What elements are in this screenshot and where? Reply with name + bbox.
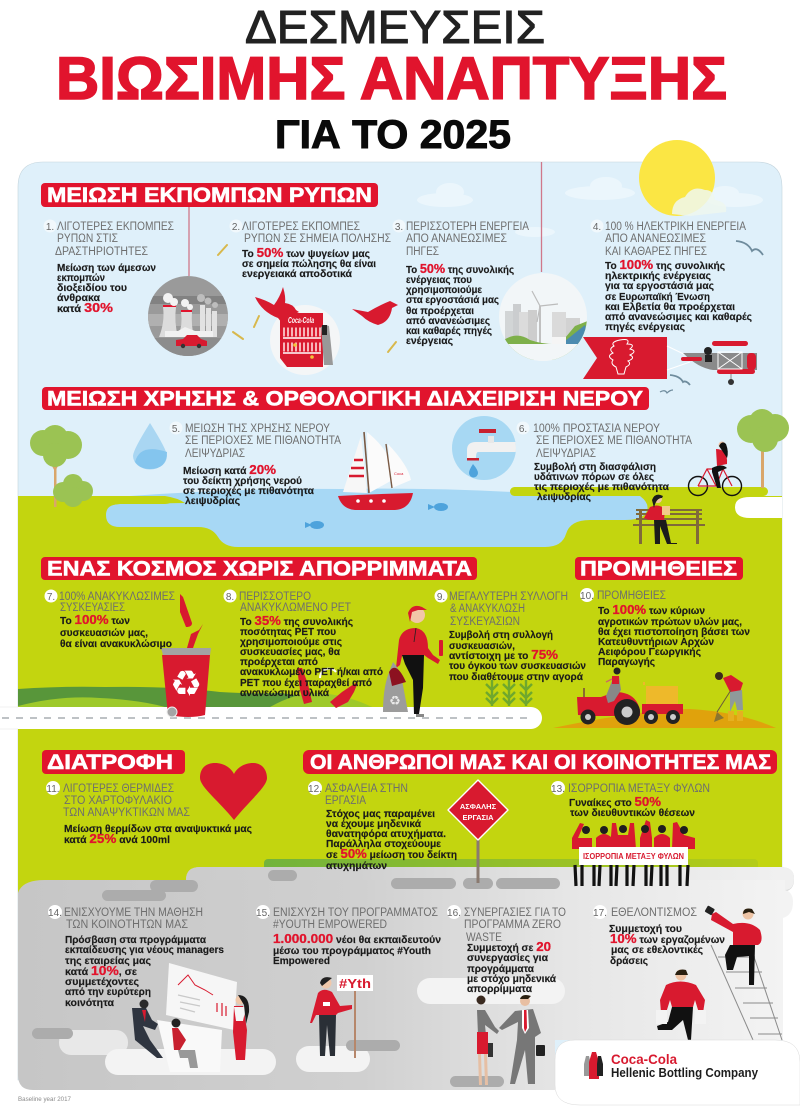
text block: commitment 11: Μείωση θερμίδων στα αναψυκτικά μας [64, 824, 252, 835]
text block: commitment 1: ΔΡΑΣΤΗΡΙΟΤΗΤΕΣ [55, 246, 148, 258]
icon: factory [148, 276, 228, 356]
text block: commitment 3: και καθαρές πηγές [406, 326, 492, 337]
icon: birds [660, 241, 763, 393]
text block: commitment 5 [170, 422, 341, 507]
text block: commitment 16: Συμμετοχή σε 20 [467, 939, 551, 954]
text block: commitment 16 [447, 905, 566, 995]
text block: commitment 12: ΕΡΓΑΣΙΑ [325, 795, 366, 807]
icon: fridge with bird: Coca-Cola [288, 316, 314, 325]
text block: commitment 12: να έχουμε μηδενικά [326, 819, 422, 830]
text block: commitment 14: ΕΝΙΣΧΥΟΥΜΕ ΤΗΝ ΜΑΘΗΣΗ [64, 907, 203, 919]
text block: commitment 9: ΣΥΣΚΕΥΑΣΙΩΝ [450, 616, 520, 628]
icon: road sign: ΑΣΦΑΛΗΣ [460, 802, 497, 811]
text block: commitment 14: κατά 10%, σε [65, 963, 137, 978]
text block: commitment 9: συσκευασιών, [449, 641, 515, 652]
green stripe [264, 859, 758, 871]
text block: commitment 8: ανανεώσιμα υλικά [240, 688, 330, 699]
text block: commitment 1: κατά 30% [57, 300, 113, 315]
text block: commitment 10: Αειφόρου Γεωργικής [598, 647, 701, 658]
text block: commitment 4: σε Ευρωπαϊκή Ένωση [605, 292, 710, 303]
text block: commitment 5: 5. [172, 424, 180, 435]
heading: waste: ΕΝΑΣ ΚΟΣΜΟΣ ΧΩΡΙΣ ΑΠΟΡΡΙΜΜΑΤΑ [47, 558, 472, 580]
icon: red ribbon with light bulb [583, 337, 667, 379]
text block: commitment 17: Συμμετοχή του [609, 924, 682, 935]
text block: commitment 16: με στόχο μηδενικά [467, 974, 557, 985]
text block: commitment 17: μας σε εθελοντικές [611, 945, 703, 956]
text block: commitment 10: αγροτικών πρώτων υλών μας, [598, 617, 742, 628]
text block: commitment 14: από την ευρύτερη [65, 987, 151, 998]
text block: commitment 2: ΛΙΓΟΤΕΡΕΣ ΕΚΠΟΜΠΕΣ [242, 221, 360, 233]
text block: commitment 17: 17. [593, 908, 607, 919]
text block: commitment 16: 16. [447, 908, 461, 919]
text block: commitment 11: ΛΙΓΟΤΕΡΕΣ ΘΕΡΜΙΔΕΣ [63, 783, 174, 795]
title [56, 1, 727, 157]
icon: wheat [486, 680, 532, 706]
text block: commitment 8: συσκευασίες μας, θα [240, 647, 341, 658]
text block: commitment 7: συσκευασιών μας, [60, 628, 148, 639]
text block: commitment 3: ΠΗΓΕΣ [406, 246, 439, 258]
text block: commitment 8: ΑΝΑΚΥΚΛΩΜΕΝΟ ΡΕΤ [240, 602, 351, 614]
text block: commitment 14: ΤΩΝ ΚΟΙΝΟΤΗΤΩΝ ΜΑΣ [66, 919, 188, 931]
text block: commitment 4: και Ελβετία θα προέρχεται [605, 302, 735, 313]
icon: recycling bin and bottles: ♻ [170, 664, 202, 705]
icon: sailboat: Coca [394, 471, 404, 476]
text block: commitment 1 [44, 220, 174, 315]
text block: commitment 6: 6. [519, 424, 527, 435]
title: ΔΕΣΜΕΥΣΕΙΣ [245, 1, 545, 53]
icon: man with bag and bottle [383, 606, 443, 717]
icon: youth ambassador with sign: #Yth [339, 976, 371, 991]
text block: commitment 6 [516, 422, 692, 503]
icon: water tap [452, 416, 520, 480]
text block: commitment 6: ΣΕ ΠΕΡΙΟΧΕΣ ΜΕ ΠΙΘΑΝΟΤΗΤΑ [536, 435, 692, 447]
text block: commitment 15: 15. [256, 908, 270, 919]
text block: commitment 9: ΜΕΓΑΛΥΤΕΡΗ ΣΥΛΛΟΓΗ [449, 591, 568, 603]
text block: commitment 13 [551, 781, 710, 819]
text block: commitment 11: ΣΤΟ ΧΑΡΤΟΦΥΛΑΚΙΟ [64, 795, 172, 807]
text block: commitment 1: 1. [46, 222, 54, 233]
text block: commitment 5: λειψυδρίας [185, 496, 240, 507]
icon: man with bag and bottle: ♻ [389, 694, 401, 709]
text block: commitment 2: ΡΥΠΩΝ ΣΕ ΣΗΜΕΙΑ ΠΟΛΗΣΗΣ [244, 233, 391, 245]
connector lines [189, 162, 542, 276]
text block: commitment 8: Το 35% της συνολικής [240, 613, 353, 628]
text block: commitment 12: ατυχημάτων [326, 861, 387, 872]
text block: commitment 10: 10. [580, 591, 594, 602]
text block: commitment 16: προγράμματα [467, 964, 535, 975]
text block: commitment 8: ανακυκλωμένο ΡΕΤ ή/και από [240, 667, 383, 678]
text block: commitment 1: άνθρακα [57, 293, 101, 304]
text block: commitment 10: θα έχει πιστοποίηση βάσει των [598, 627, 750, 638]
icon: people with banner: ΙΣΟΡΡΟΠΙΑ ΜΕΤΑΞΥ ΦΥΛΩΝ [583, 852, 684, 861]
text block: commitment 8: ποσότητας ΡΕΤ που [240, 627, 336, 638]
text block: commitment 3: ΠΕΡΙΣΣΟΤΕΡΗ ΕΝΕΡΓΕΙΑ [406, 221, 529, 233]
text block: commitment 3: χρησιμοποιούμε [406, 285, 482, 296]
heading: sourcing: ΠΡΟΜΗΘΕΙΕΣ [580, 558, 737, 580]
text block: commitment 10: ΠΡΟΜΗΘΕΙΕΣ [597, 590, 666, 602]
text block: commitment 3: ΑΠΟ ΑΝΑΝΕΩΣΙΜΕΣ [406, 233, 507, 245]
text block: commitment 8: 8. [226, 592, 234, 603]
text block: commitment 1: Μείωση των άμεσων [57, 263, 156, 274]
text block: commitment 9: Συμβολή στη συλλογή [449, 630, 553, 641]
text block: commitment 13: 13. [551, 784, 565, 795]
text block: commitment 2: 2. [232, 222, 240, 233]
text block: commitment 7: 100% ΑΝΑΚΥΚΛΩΣΙΜΕΣ [59, 591, 175, 603]
text block: commitment 4: 4. [593, 222, 601, 233]
icon: youth ambassador with sign [310, 975, 373, 1058]
icon: falling bottles [297, 668, 358, 708]
text block: commitment 12: Παράλληλα στοχεύουμε [326, 839, 441, 850]
heading: nutrition: ΔΙΑΤΡΟΦΗ [47, 751, 173, 774]
heading: water: ΜΕΙΩΣΗ ΧΡΗΣΗΣ & ΟΡΘΟΛΟΓΙΚΗ ΔΙΑΧΕΙΡΙΣΗ ΝΕΡΟΥ [47, 388, 643, 410]
text block: commitment 17: δράσεις [610, 956, 648, 967]
text block: commitment 2: ενεργειακά αποδοτικά [242, 269, 353, 280]
text block: commitment 15: 1.000.000 νέοι θα εκπαιδευτούν [273, 931, 441, 946]
text block: commitment 12: ΑΣΦΑΛΕΙΑ ΣΤΗΝ [325, 783, 408, 795]
text block: commitment 11 [46, 781, 252, 846]
text block: commitment 10 [580, 588, 750, 668]
text block: commitment 4: Το 100% της συνολικής [605, 257, 725, 272]
text block: commitment 2: Το 50% των ψυγείων μας [242, 245, 370, 260]
text block: commitment 16: απορρίμματα [467, 984, 533, 995]
text block: commitment 17: 10% των εργαζομένων [610, 931, 725, 946]
text block: commitment 6: Συμβολή στη διασφάλιση [534, 462, 656, 473]
icon: road sign: ΕΡΓΑΣΙΑ [462, 813, 494, 822]
icon: cyclist [688, 442, 742, 496]
text block: commitment 12: σε 50% μείωση του δείκτη [326, 846, 457, 861]
panel: landscape background [18, 162, 782, 1080]
text block: commitment 15: #YOUTH EMPOWERED [273, 919, 387, 931]
text block: commitment 5: ΣΕ ΠΕΡΙΟΧΕΣ ΜΕ ΠΙΘΑΝΟΤΗΤΑ [185, 435, 341, 447]
text block: commitment 12 [308, 781, 457, 872]
text block: commitment 15 [256, 905, 441, 967]
text block: commitment 4: ηλεκτρικής ενέργειας [605, 271, 711, 282]
text block: commitment 14 [48, 905, 224, 1009]
text block: commitment 14: 14. [48, 908, 62, 919]
text block: commitment 3: 3. [395, 222, 403, 233]
text block: commitment 8 [224, 590, 383, 699]
icon: water drop [133, 423, 167, 470]
text block: commitment 11: 11. [46, 784, 60, 795]
panel: company logo: Hellenic Bottling Company [611, 1065, 759, 1080]
hills and road [0, 687, 542, 729]
title: ΓΙΑ ΤΟ 2025 [275, 113, 511, 157]
text block: commitment 8: χρησιμοποιούμε στις [240, 637, 342, 648]
clouds [417, 177, 763, 237]
footnote: Baseline year 2017 [18, 1097, 72, 1103]
icon: sun [639, 140, 726, 216]
text block: commitment 14: της εταιρείας μας [65, 956, 151, 967]
text block: commitment 7: 7. [47, 592, 55, 603]
text block: commitment 3: στα εργοστάσιά μας [406, 295, 499, 306]
text block: commitment 6: λειψυδρίας [537, 492, 591, 503]
icon: sailboat [338, 432, 413, 510]
text block: commitment 16: WASTE [466, 932, 502, 944]
heading: emissions: ΜΕΙΩΣΗ ΕΚΠΟΜΠΩΝ ΡΥΠΩΝ [47, 184, 372, 207]
text block: commitment 16: ΠΡΟΓΡΑΜΜΑ ZERO [464, 919, 561, 931]
text block: commitment 16: συνεργασίες για [467, 953, 549, 964]
text block: commitment 6: υδάτινων πόρων σε όλες [534, 472, 654, 483]
icon: plane [667, 341, 757, 385]
text block: commitment 5: Μείωση κατά 20% [183, 462, 276, 477]
text block: commitment 14: Πρόσβαση στα προγράμματα [65, 935, 207, 946]
icon: ladder and volunteers [656, 905, 782, 1040]
text block: commitment 6: 100% ΠΡΟΣΤΑΣΙΑ ΝΕΡΟΥ [533, 423, 660, 435]
panel: grey community ground [18, 867, 794, 1090]
text block: commitment 9: που διαθέτουμε στην αγορά [449, 672, 584, 683]
text block: commitment 8: ΡΕΤ που έχει παραχθεί από [240, 678, 372, 689]
text block: commitment 4: πηγές ενέργειας [605, 322, 685, 333]
icon: people with banner [572, 820, 695, 886]
text block: commitment 4 [590, 220, 752, 333]
text block: commitment 4: από ανανεώσιμες και καθαρές [605, 312, 752, 323]
text block: commitment 9 [434, 590, 586, 683]
text block: commitment 3: Το 50% της συνολικής [406, 261, 514, 276]
text block: commitment 9: του όγκου των συσκευασιών [449, 661, 586, 672]
text block: commitment 2 [230, 220, 391, 280]
text block: commitment 7: ΣΥΣΚΕΥΑΣΙΕΣ [60, 602, 125, 614]
text block: commitment 7: θα είναι ανακυκλώσιμο [60, 639, 172, 650]
text block: commitment 7: Το 100% των [60, 612, 130, 627]
text block: commitment 5: του δείκτη χρήσης νερού [183, 476, 302, 487]
text block: commitment 4: ΑΠΟ ΑΝΑΝΕΩΣΙΜΕΣ [605, 233, 706, 245]
text block: commitment 9: αντίστοιχη με το 75% [449, 647, 558, 662]
icon: team at presentation screen [132, 963, 249, 1072]
icon: tree right [737, 409, 789, 488]
text block: commitment 3: ενέργειας που [406, 275, 472, 286]
text block: commitment 12: θανατηφόρα ατυχήματα. [326, 829, 446, 840]
text block: commitment 14: συμμετέχοντες [65, 977, 139, 988]
text block: commitment 10: Κατευθυντήριων Αρχών [598, 637, 714, 648]
text block: commitment 17 [593, 905, 725, 967]
text block: commitment 6: τις περιοχές με πιθανότητα [534, 482, 670, 493]
text block: commitment 3: ενέργειας [406, 336, 453, 347]
text block: commitment 1: εκπομπών [57, 273, 105, 284]
text block: commitment 11: κατά 25% ανά 100ml [64, 831, 170, 846]
text block: commitment 15: Empowered [273, 956, 330, 967]
text block: commitment 10: Το 100% των κύριων [598, 602, 705, 617]
text block: commitment 14: εκπαίδευσης για νέους managers [65, 945, 224, 956]
icon: woman on bench [633, 495, 705, 544]
text block: commitment 2: σε σημεία πώλησης θα είναι [242, 259, 376, 270]
panel: company logo [555, 1040, 800, 1105]
icon: fish [305, 503, 448, 529]
text block: commitment 13: Γυναίκες στο 50% [569, 794, 661, 809]
text block: commitment 3 [392, 220, 529, 347]
heading: people and communities: ΟΙ ΑΝΘΡΩΠΟΙ ΜΑΣ ΚΑΙ ΟΙ ΚΟΙΝΟΤΗΤΕΣ ΜΑΣ [310, 751, 771, 774]
text block: commitment 9: 9. [437, 592, 445, 603]
text block: commitment 12: Στόχος μας παραμένει [326, 809, 435, 820]
text block: commitment 9: & ΑΝΑΚΥΚΛΩΣΗ [450, 603, 525, 615]
icon: logo bottles [584, 1052, 603, 1079]
icon: red bird [352, 301, 398, 325]
panel: company logo: Coca-Cola [611, 1052, 677, 1067]
text block: commitment 1: ΡΥΠΩΝ ΣΤΙΣ [57, 233, 118, 245]
icon: city with wind turbines [498, 273, 590, 364]
text block: commitment 4: για τα εργοστάσιά μας [605, 281, 714, 292]
text block: commitment 15: μέσω του προγράμματος #Youth [273, 946, 431, 957]
text block: commitment 11: ΤΩΝ ΑΝΑΨΥΚΤΙΚΩΝ ΜΑΣ [63, 807, 190, 819]
text block: commitment 13: ΙΣΟΡΡΟΠΙΑ ΜΕΤΑΞΥ ΦΥΛΩΝ [568, 783, 710, 795]
text block: commitment 3: από ανανεώσιμες [406, 316, 490, 327]
text block: commitment 15: ΕΝΙΣΧΥΣΗ ΤΟΥ ΠΡΟΓΡΑΜΜΑΤΟΣ [273, 907, 438, 919]
text block: commitment 13: των διευθυντικών θέσεων [570, 808, 695, 819]
icon: feathers [218, 245, 396, 352]
icon: handshake [476, 995, 545, 1085]
icon: heart [200, 763, 267, 820]
icon: road sign [448, 780, 508, 883]
icon: tree left [30, 425, 93, 507]
icon: tractor and farmer [553, 668, 776, 728]
text block: commitment 4: ΚΑΙ ΚΑΘΑΡΕΣ ΠΗΓΕΣ [605, 246, 707, 258]
title: ΒΙΩΣΙΜΗΣ ΑΝΑΠΤΥΞΗΣ [56, 45, 727, 112]
text block: commitment 7 [44, 590, 175, 650]
text block: commitment 3: θα προέρχεται [406, 306, 474, 317]
text block: commitment 1: ΛΙΓΟΤΕΡΕΣ ΕΚΠΟΜΠΕΣ [57, 221, 174, 233]
text block: commitment 8: προέρχεται από [240, 657, 318, 668]
text block: commitment 5: ΛΕΙΨΥΔΡΙΑΣ [185, 448, 245, 460]
text block: commitment 1: διοξειδίου του [57, 283, 127, 294]
text block: commitment 10: Παραγωγής [598, 657, 655, 668]
text block: commitment 12: 12. [308, 784, 322, 795]
text block: commitment 16: ΣΥΝΕΡΓΑΣΙΕΣ ΓΙΑ ΤΟ [464, 907, 566, 919]
icon: fridge with bird [255, 287, 340, 375]
icon: recycling bin and bottles [161, 592, 211, 717]
text block: commitment 5: σε περιοχές με πιθανότητα [183, 486, 315, 497]
text block: commitment 5: ΜΕΙΩΣΗ ΤΗΣ ΧΡΗΣΗΣ ΝΕΡΟΥ [185, 423, 330, 435]
text block: commitment 6: ΛΕΙΨΥΔΡΙΑΣ [536, 448, 596, 460]
text block: commitment 8: ΠΕΡΙΣΣΟΤΕΡΟ [239, 591, 311, 603]
text block: commitment 17: ΕΘΕΛΟΝΤΙΣΜΟΣ [611, 907, 697, 919]
text block: commitment 4: 100 % ΗΛΕΚΤΡΙΚΗ ΕΝΕΡΓΕΙΑ [605, 221, 746, 233]
text block: commitment 14: κοινότητα [65, 998, 115, 1009]
